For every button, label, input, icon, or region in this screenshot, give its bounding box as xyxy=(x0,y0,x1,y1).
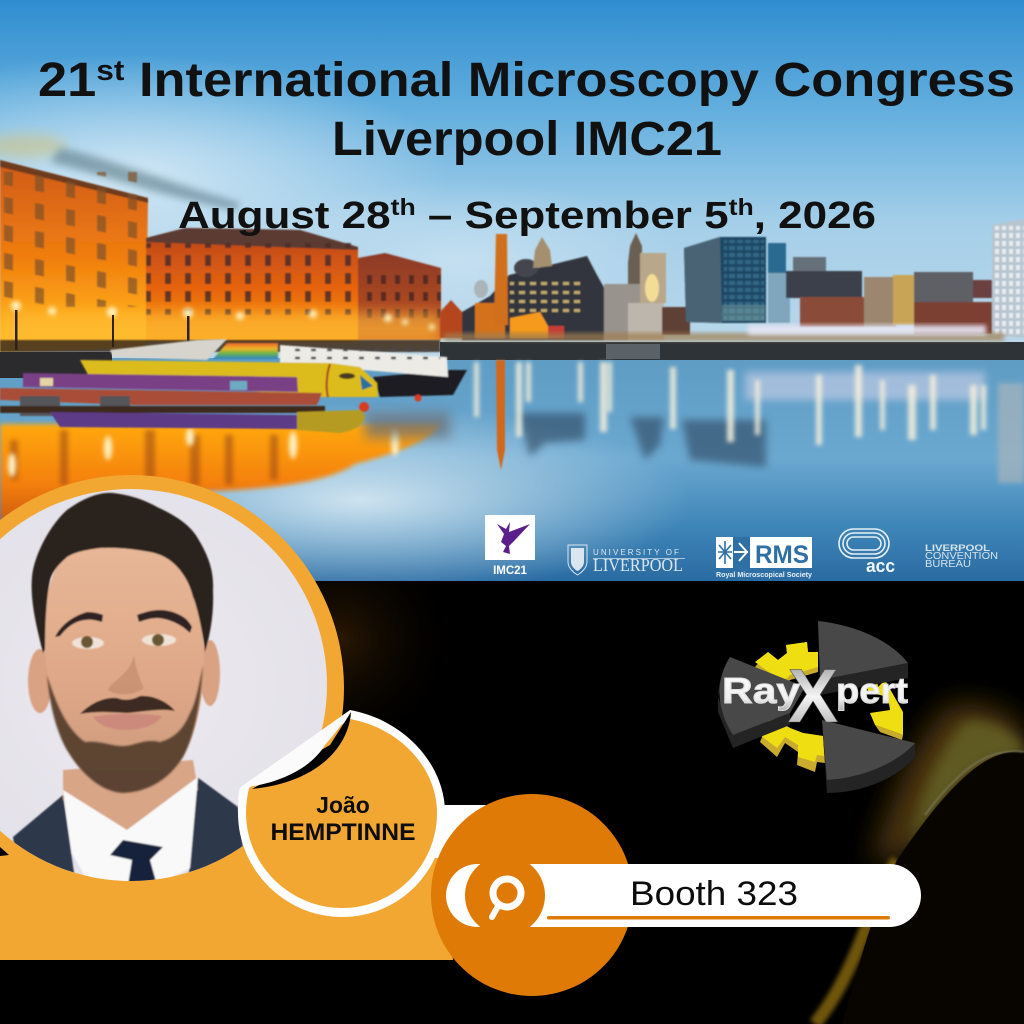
title line 2: Liverpool IMC21 xyxy=(332,113,722,166)
title xyxy=(38,54,1015,237)
pill icon cut-out xyxy=(465,856,545,936)
logo: IMC21 xyxy=(485,515,535,577)
name bubble xyxy=(238,710,445,917)
logo: University of Liverpool xyxy=(568,545,685,575)
yellow gear xyxy=(755,642,903,772)
skyline xyxy=(440,219,1024,340)
logo: ACC Liverpool xyxy=(839,529,895,576)
logo: Liverpool Convention Bureau: CONVENTION xyxy=(925,551,998,562)
white passenger boat xyxy=(110,339,467,397)
cloud streak xyxy=(50,148,240,210)
speaker name: HEMPTINNE xyxy=(270,819,416,846)
event dates: , 2026 xyxy=(754,195,876,237)
logo: Royal Microscopical Society xyxy=(716,537,813,579)
warehouses xyxy=(0,160,441,352)
water highlight xyxy=(206,416,669,581)
orange disc xyxy=(431,794,633,996)
wordmark: Ray xyxy=(722,670,800,711)
hair xyxy=(32,493,213,653)
wordmark: pert xyxy=(836,670,908,711)
logo: University of Liverpool: UNIVERSITY OF xyxy=(593,548,681,557)
yellow narrowboat xyxy=(80,360,378,397)
pontoons xyxy=(20,396,130,416)
icon: magnifying glass xyxy=(492,879,521,917)
peeled corner xyxy=(239,711,350,788)
decorative gold swoosh lower right xyxy=(815,704,1024,1024)
event dates: – September 5 xyxy=(416,195,729,237)
warehouse right xyxy=(358,253,441,340)
purple narrowboat xyxy=(0,373,322,405)
ground floor glow xyxy=(0,312,440,342)
lips xyxy=(93,714,162,730)
quay and lights xyxy=(0,301,1024,378)
neck xyxy=(63,760,198,832)
white connector xyxy=(434,805,486,858)
sponsor logos xyxy=(485,515,998,579)
black notch at left edge xyxy=(0,847,9,856)
logo: University of Liverpool: LIVERPOOL xyxy=(593,555,683,575)
mooring buoys xyxy=(359,394,422,412)
shirt collar xyxy=(63,777,198,885)
warehouse left xyxy=(0,160,148,352)
logo: ACC Liverpool: acc xyxy=(866,556,895,576)
sky xyxy=(0,0,1024,362)
panel: Liverpool Royal Albert Dock photo xyxy=(0,0,1024,595)
booth pill xyxy=(446,856,921,936)
sky glow left xyxy=(0,63,415,238)
bubble orange face xyxy=(246,719,437,908)
eyes xyxy=(72,637,104,649)
beard xyxy=(47,665,203,793)
peel shadow xyxy=(252,712,351,789)
booth label: Booth 323 xyxy=(630,875,798,913)
orange portrait ring xyxy=(0,475,344,901)
face xyxy=(44,546,205,769)
nose shadow xyxy=(108,655,144,694)
wordmark xyxy=(722,670,908,711)
speaker name xyxy=(270,792,416,846)
speaker name: João xyxy=(316,792,370,818)
title line 1: st xyxy=(96,55,125,87)
orange banner xyxy=(0,850,453,960)
event dates: August 28 xyxy=(178,195,362,237)
warehouse centre xyxy=(146,228,358,342)
bubble white border xyxy=(238,710,445,917)
rainbow canopy xyxy=(213,343,278,359)
pill background xyxy=(446,864,921,927)
title line 1: 21 xyxy=(38,54,91,107)
sky glow horizon xyxy=(334,198,609,308)
logo: Liverpool Convention Bureau: LIVERPOOL xyxy=(925,543,990,554)
logo: Royal Microscopical Society: RMS xyxy=(755,541,809,569)
logo: RayXpert xyxy=(718,621,915,793)
event dates: th xyxy=(729,194,754,220)
tie xyxy=(110,840,163,885)
eyebrows xyxy=(55,612,103,637)
water xyxy=(0,358,1024,581)
ears xyxy=(28,649,52,713)
logo: Liverpool Convention Bureau: BUREAU xyxy=(925,559,971,570)
radiation sectors xyxy=(718,621,915,793)
logo: Liverpool Convention Bureau xyxy=(925,543,998,570)
event dates: th xyxy=(391,194,416,220)
pill underline xyxy=(547,916,890,920)
jacket xyxy=(12,777,244,873)
portrait photo xyxy=(0,489,327,881)
logo: IMC21: IMC21 xyxy=(493,565,528,577)
title line 1: International Microscopy Congress xyxy=(124,54,1015,107)
purple boat reflection xyxy=(0,406,365,433)
tinted flare xyxy=(0,134,67,158)
water reflections xyxy=(0,360,1024,522)
moored boats xyxy=(0,339,467,433)
mustache xyxy=(80,696,175,714)
logo: Royal Microscopical Society: Royal Microscopical Society xyxy=(716,570,813,579)
big X mark: X xyxy=(788,654,839,739)
